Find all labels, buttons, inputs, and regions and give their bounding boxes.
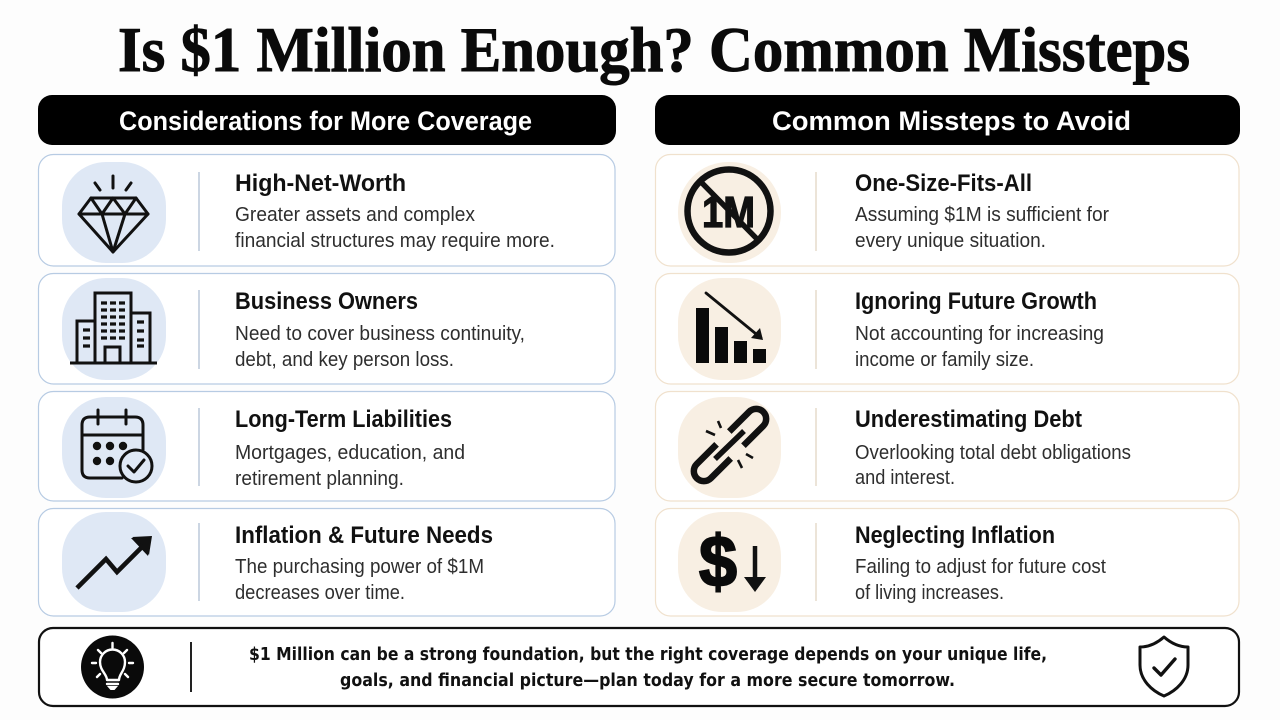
card text: Neglecting Inflation [855, 522, 1055, 549]
card text: Greater assets and complex [235, 204, 475, 226]
card text [235, 170, 555, 252]
card text: One-Size-Fits-All [855, 170, 1032, 197]
icon: calendar with check [82, 410, 152, 482]
heading: missteps: Common Missteps to Avoid [772, 106, 1131, 136]
card text: retirement planning. [235, 468, 404, 490]
icon: crossed-out 1M [688, 170, 770, 252]
card: long-term liabilities [38, 392, 615, 501]
card text [235, 288, 525, 371]
card text: every unique situation. [855, 230, 1046, 252]
card text [235, 406, 465, 490]
callout: bottom summary [39, 628, 1239, 706]
icon: dollar with down arrow [699, 522, 766, 602]
icon: shield with check [1140, 637, 1188, 696]
icon: falling bars with arrow [696, 293, 766, 363]
card text: decreases over time. [235, 582, 405, 604]
card text: Assuming $1M is sufficient for [855, 204, 1109, 226]
icon: rising trend arrow [77, 536, 152, 588]
card: one-size-fits-all [656, 154, 1239, 266]
heading: considerations: Considerations for More Coverage [119, 106, 532, 136]
card text [235, 522, 493, 604]
icon: light bulb [81, 636, 144, 698]
card text: High-Net-Worth [235, 170, 406, 197]
card text [855, 406, 1131, 489]
icon: crossed-out 1M: 1M [702, 188, 755, 237]
card: underestimating debt [656, 392, 1239, 501]
card text: financial structures may require more. [235, 230, 555, 252]
card: neglecting inflation [656, 508, 1239, 616]
card: high-net-worth [38, 154, 615, 266]
heading: considerations [38, 95, 616, 145]
card text [855, 522, 1106, 604]
card text: Ignoring Future Growth [855, 288, 1097, 315]
panel: considerations for more coverage [38, 95, 616, 616]
title: Is $1 Million Enough? Common Missteps [118, 14, 1190, 85]
icon: broken chain link [690, 405, 770, 485]
card text [855, 288, 1104, 371]
card text: Failing to adjust for future cost [855, 556, 1106, 578]
icon: dollar with down arrow: $ [699, 522, 737, 602]
heading: missteps [655, 95, 1240, 145]
card text: Need to cover business continuity, [235, 323, 525, 345]
card text: Mortgages, education, and [235, 442, 465, 464]
summary text [249, 645, 1047, 691]
card text: Long-Term Liabilities [235, 406, 452, 433]
card text: of living increases. [855, 582, 1004, 604]
panel: common missteps to avoid [655, 95, 1240, 616]
card text: income or family size. [855, 349, 1034, 371]
summary text: goals, and financial picture—plan today for a more secure tomorrow. [340, 671, 955, 691]
card text: Inflation & Future Needs [235, 522, 493, 549]
card text: and interest. [855, 467, 955, 489]
card: business owners [38, 274, 615, 384]
card text: Business Owners [235, 288, 418, 315]
card: ignoring future growth [656, 274, 1239, 384]
icon: office buildings [70, 293, 157, 363]
card text [855, 170, 1109, 252]
card text: Not accounting for increasing [855, 323, 1104, 345]
card text: Overlooking total debt obligations [855, 442, 1131, 464]
icon: diamond [79, 176, 148, 252]
summary text: $1 Million can be a strong foundation, but the right coverage depends on your unique life, [249, 645, 1047, 665]
card text: The purchasing power of $1M [235, 556, 484, 578]
card text: Underestimating Debt [855, 406, 1082, 433]
card: inflation and future needs [38, 508, 615, 616]
card text: debt, and key person loss. [235, 349, 454, 371]
